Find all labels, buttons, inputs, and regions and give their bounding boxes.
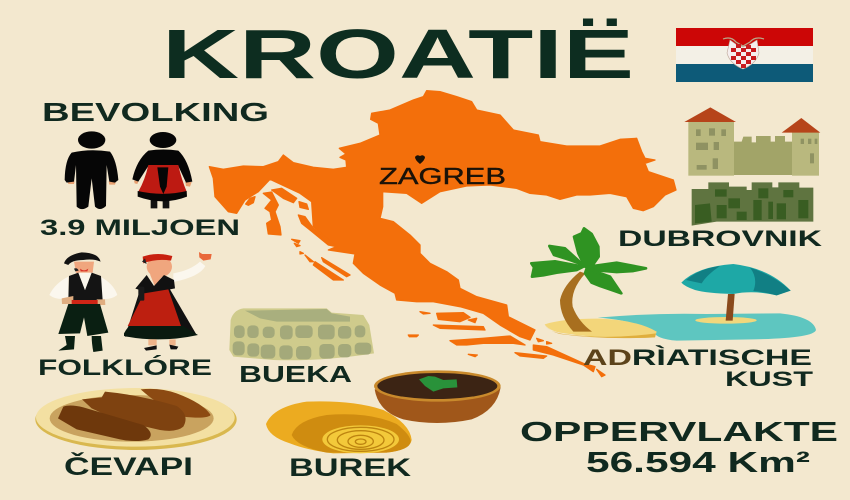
label: Adriatic coast (583, 345, 813, 391)
icon: Croatian flag (676, 28, 813, 82)
palm trunk (560, 272, 592, 332)
mainland (209, 91, 676, 340)
label: area: OPPERVLAKTE (520, 416, 838, 447)
label: Burek: BUREK (289, 454, 411, 482)
label: population number: 3.9 MILJOEN (40, 215, 240, 240)
icon: bowl of soup (374, 370, 501, 423)
label: Zagreb: ZAGREB (379, 163, 506, 189)
label: Adriatic coast: KUST (725, 368, 813, 391)
label: folklore: FOLKLÓRE (38, 355, 212, 380)
icon: Roman amphitheatre (229, 308, 374, 360)
label: Adriatic coast: AD RÌATISCHE (583, 345, 812, 370)
beach water (598, 313, 816, 341)
label: Bueka: BUEKA (239, 361, 352, 387)
title: KROATIË (162, 15, 634, 93)
icon: population man and woman silhouettes (65, 131, 192, 209)
sand island (545, 319, 657, 338)
man in folk costume (49, 252, 117, 352)
label: area (520, 416, 838, 479)
capital marker: heart (415, 155, 425, 164)
map of Croatia (209, 91, 676, 377)
label: area: 56.594 Km² (586, 447, 810, 479)
small sand (695, 317, 757, 324)
woman in folk costume (124, 252, 212, 351)
icon: burek pastry (266, 401, 412, 453)
lower wall (692, 182, 813, 226)
upper castle (684, 107, 820, 176)
islands (246, 188, 605, 377)
heading: population: BEVOLKING (42, 97, 269, 127)
label: Dubrovnik: DUBROVNIK (618, 226, 822, 251)
icon: Dubrovnik castle and walls (531, 107, 820, 341)
icon: folklore couple (49, 252, 212, 352)
palm leaves (531, 228, 646, 293)
umbrella pole (726, 294, 735, 321)
umbrella canopy (681, 264, 791, 295)
icon: plate of cevapi (35, 388, 237, 450)
label: Cevapi: ČEVAPI (64, 451, 193, 481)
